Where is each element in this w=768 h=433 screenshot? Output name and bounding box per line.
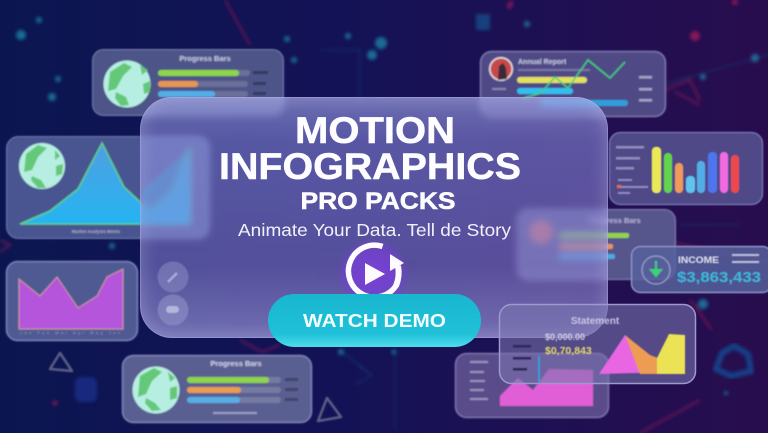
title: INFOGRAPHICS [219, 146, 521, 187]
title [219, 110, 521, 215]
panel: progress bars bottom [122, 356, 312, 422]
pink area chart [500, 369, 593, 406]
panel: income [632, 246, 768, 292]
icon: globe [132, 366, 180, 414]
amounts: $0,000.00 [545, 332, 585, 342]
icon: globe [104, 60, 150, 108]
icon: faded round button lower [158, 294, 188, 326]
heading: progress bars: Progress Bars [210, 359, 262, 368]
income label: INCOME [678, 255, 719, 266]
panel: progress bars top left [92, 50, 284, 116]
icon: faded round button upper [158, 262, 188, 292]
button: watch demo [268, 294, 481, 347]
panel: lower right area chart [500, 304, 696, 384]
purple area chart [19, 269, 123, 329]
panel: profile line chart [480, 52, 666, 116]
icon: avatar [489, 57, 513, 81]
panel: progress bars behind main [518, 210, 676, 280]
panel: purple area chart [6, 262, 138, 340]
icon: avatar [529, 220, 553, 244]
small labels [732, 254, 759, 263]
side labels [513, 345, 540, 382]
multi-colour area chart [599, 334, 685, 374]
title: MOTION [295, 110, 455, 151]
green line chart [524, 60, 625, 98]
panel: main glass card [140, 97, 608, 338]
heading: Progress Bars [589, 216, 641, 225]
icon: blue ring right [716, 346, 751, 376]
amount value: $0,70,843 [545, 345, 592, 357]
profile bars [492, 69, 652, 106]
chart legend [616, 146, 648, 194]
icon: replay play button [336, 237, 410, 311]
panel: bar chart [610, 132, 762, 204]
progress bars [158, 70, 268, 97]
heading: profile name: Annual Report [518, 59, 567, 66]
icon: outline triangle bottom [318, 398, 341, 421]
chart caption: Market Analysis Metric [72, 229, 121, 234]
faded chart inside main card [142, 136, 209, 239]
title: PRO PACKS [300, 188, 456, 215]
blue area chart [20, 143, 190, 224]
panel: bottom pink area chart [456, 354, 608, 418]
tagline: Animate Your Data. Tell de Story [238, 220, 511, 240]
button label: WATCH DEMO [303, 310, 446, 331]
icon: income arrow [642, 256, 670, 284]
icon: outline triangle left [50, 353, 72, 371]
heading: Statement [571, 316, 620, 327]
progress bars [559, 233, 629, 259]
progress bars [187, 377, 298, 414]
axis labels: Jan Feb Mar Apr May Jun [20, 331, 120, 335]
icon: globe [19, 143, 65, 189]
labels [470, 361, 488, 400]
bars [652, 147, 739, 193]
income value: $3,863,433 [677, 269, 761, 286]
panel: area chart left [6, 136, 210, 238]
heading: progress bars: Progress Bars [179, 54, 231, 63]
